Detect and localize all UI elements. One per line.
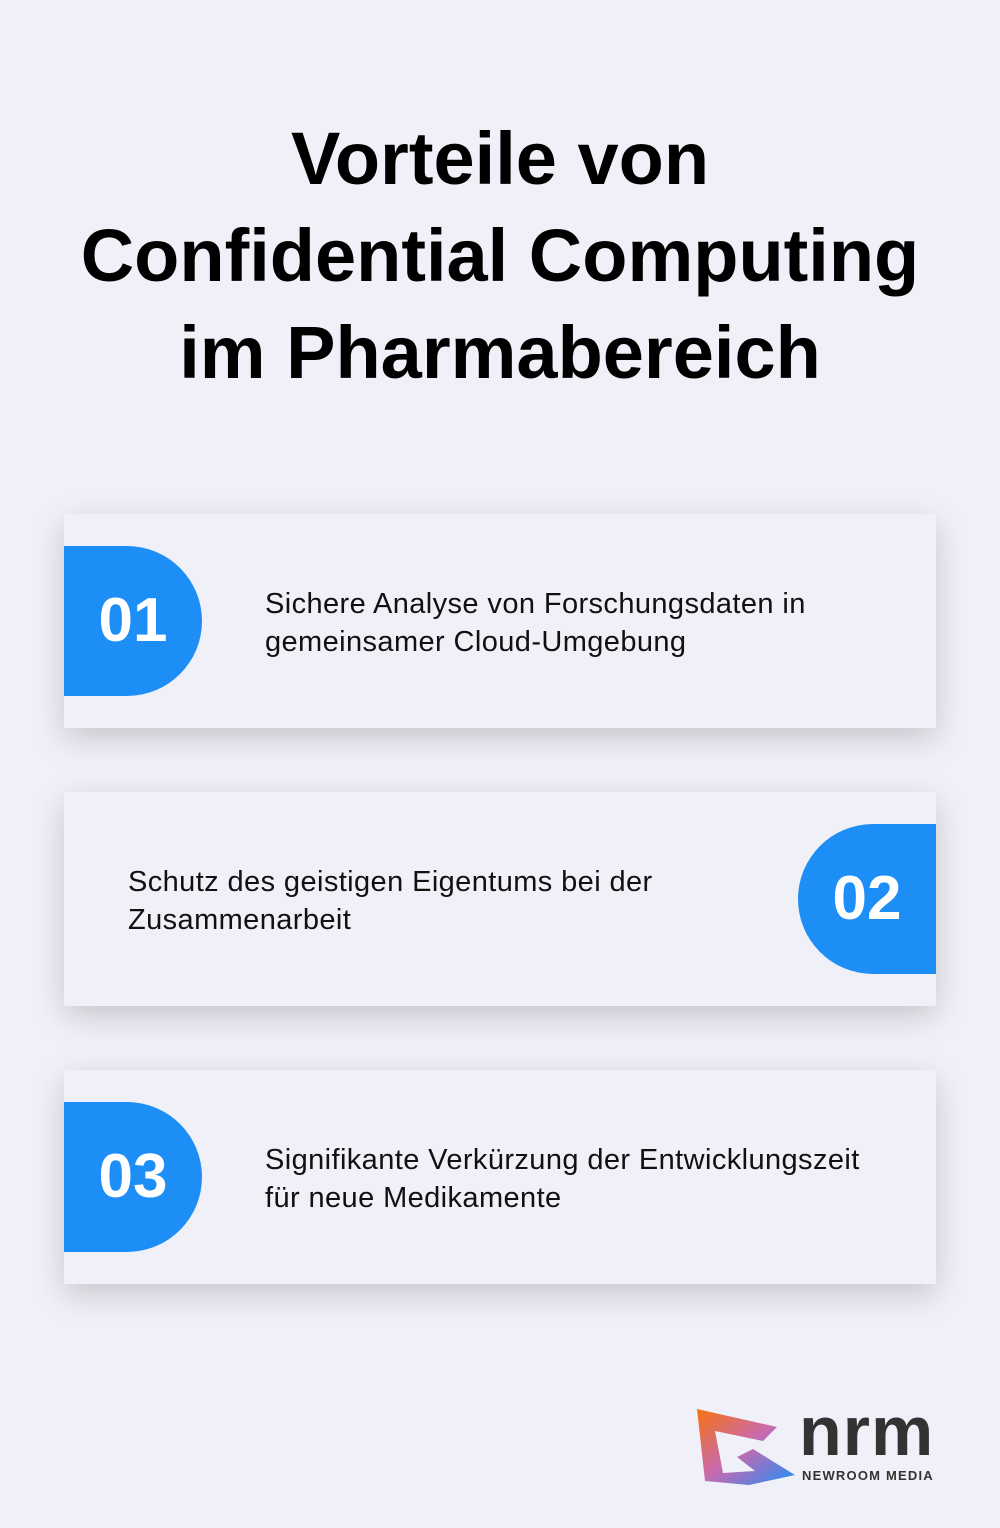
logo: NEWROOM MEDIA xyxy=(802,1468,934,1483)
text 3: für neue Medikamente xyxy=(265,1182,562,1214)
card 1 xyxy=(64,514,936,728)
text 3: Signifikante Verkürzung der Entwicklungszeit xyxy=(265,1144,860,1176)
badge 01 xyxy=(64,546,202,696)
title: Vorteile von xyxy=(291,117,709,200)
text 2: Zusammenarbeit xyxy=(128,904,351,936)
title: Confidential Computing xyxy=(81,214,919,297)
text 1: Sichere Analyse von Forschungsdaten in xyxy=(265,588,806,620)
text 3 xyxy=(265,1144,860,1214)
title: im Pharmabereich xyxy=(179,311,821,394)
text 2: Schutz des geistigen Eigentums bei der xyxy=(128,866,653,898)
logo xyxy=(697,1392,934,1485)
text 2 xyxy=(128,866,653,936)
icon: logo mark xyxy=(697,1409,795,1485)
badge 02: 02 xyxy=(833,864,901,933)
badge 01: 01 xyxy=(99,586,167,655)
logo text: nrm xyxy=(799,1392,934,1470)
text 1: gemeinsamer Cloud-Umgebung xyxy=(265,626,686,658)
card 3 xyxy=(64,1070,936,1284)
badge 03 xyxy=(64,1102,202,1252)
card 2 xyxy=(64,792,936,1006)
title xyxy=(81,117,919,394)
badge 02 xyxy=(798,824,936,974)
text 1 xyxy=(265,588,806,658)
badge 03: 03 xyxy=(99,1142,167,1211)
